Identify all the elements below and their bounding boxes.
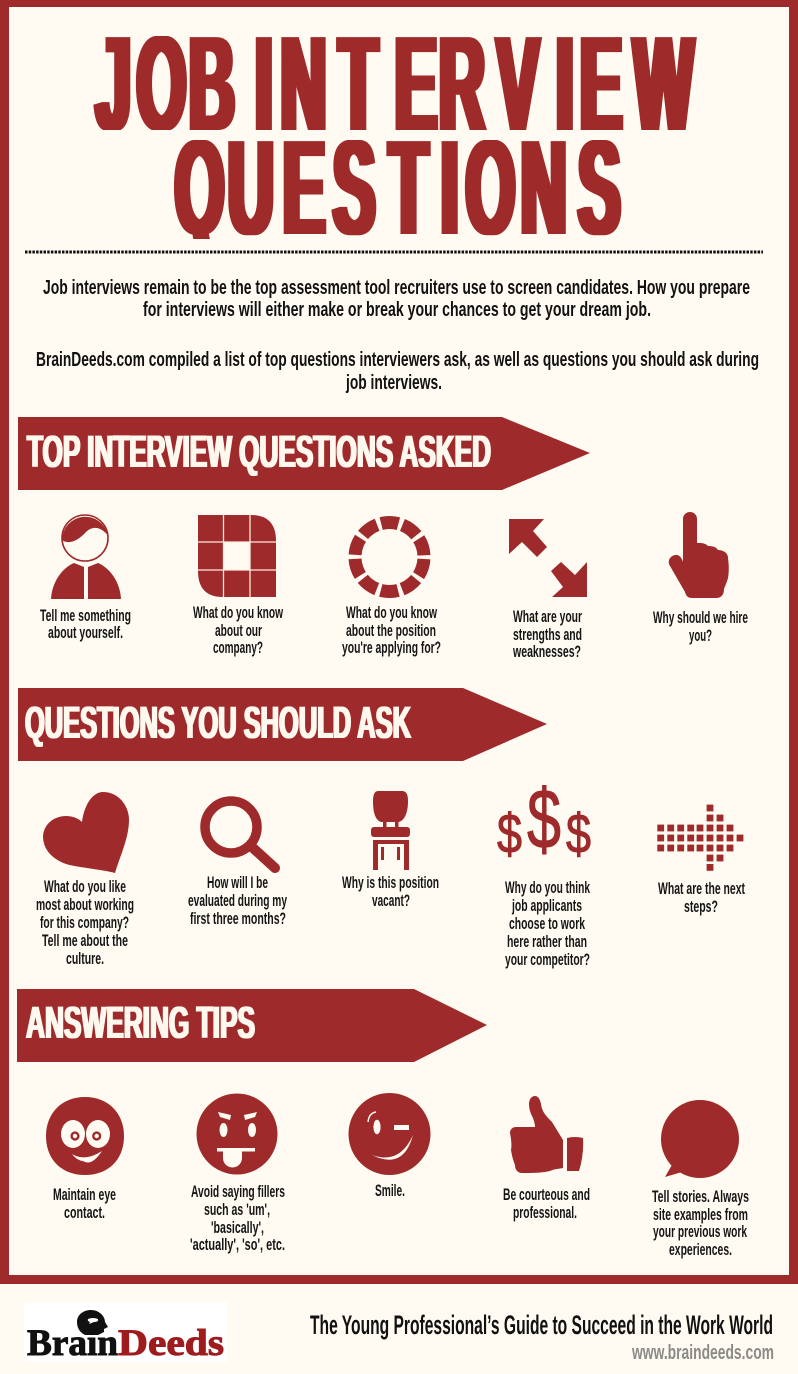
icon: dollar signs: [497, 772, 591, 866]
banner: questions you should ask: QUESTIONS YOU SHOULD ASK: [25, 697, 411, 748]
item: strengths and weaknesses: What are your: [513, 608, 582, 626]
logo: BrainDeeds: Deeds: [118, 1323, 224, 1364]
icon: diagonal arrows: [509, 519, 587, 597]
item: avoid fillers: 'actually', 'so', etc.: [190, 1236, 285, 1254]
item: why is this position vacant: Why is this position: [342, 874, 439, 892]
item: how will I be evaluated: evaluated during my: [188, 892, 288, 910]
item: next steps: What are the next: [658, 880, 745, 898]
logo: BrainDeeds: Brain: [27, 1323, 118, 1364]
item: about our company: company?: [213, 639, 263, 657]
item: why should we hire you: you?: [689, 627, 712, 645]
item: next steps: steps?: [684, 898, 718, 916]
item: smile: Smile.: [375, 1182, 405, 1200]
item: tell stories: experiences.: [669, 1241, 732, 1259]
item: tell stories: site examples from: [653, 1206, 748, 1224]
banner: answering tips: ANSWERING TIPS: [26, 997, 255, 1048]
item: what do you like: culture.: [66, 950, 104, 968]
item: about our company: about our: [215, 622, 262, 640]
item: tell stories: [652, 1100, 749, 1259]
item: avoid fillers: Avoid saying fillers: [191, 1183, 285, 1201]
item: about the position: What do you know: [346, 604, 437, 622]
item: tell me something: Tell me something: [40, 607, 131, 625]
item: smile: [348, 1093, 430, 1200]
title: JOB INTERVIEW: [96, 10, 694, 159]
icon: dollar signs: $: [527, 772, 561, 866]
item: what do you like: for this company?: [40, 914, 129, 932]
icon: heart: [43, 792, 129, 873]
item: how will I be evaluated: first three months?: [190, 910, 286, 928]
item: avoid fillers: 'basically',: [211, 1219, 264, 1237]
icon: winking face: [348, 1093, 430, 1175]
icon: magnifying glass: [205, 801, 275, 868]
item: why choose to work here: job applicants: [511, 897, 582, 915]
item: why is this position vacant: vacant?: [372, 892, 410, 910]
item: about our company: What do you know: [193, 604, 283, 622]
icon: thumbs up: [510, 1096, 583, 1173]
item: what do you like: [36, 792, 134, 968]
item: tell me something: [40, 515, 131, 642]
banner: answering tips: [17, 989, 487, 1062]
banner: questions you should ask: [18, 688, 547, 761]
item: about the position: about the position: [346, 622, 436, 640]
item: why choose to work here: your competitor?: [505, 951, 590, 969]
item: about the position: [342, 522, 441, 657]
icon: pixel arrow: [657, 805, 743, 871]
icon: dollar signs: $: [566, 802, 591, 865]
item: next steps: [657, 805, 745, 916]
item: how will I be evaluated: [188, 801, 288, 928]
item: what do you like: most about working: [36, 896, 134, 914]
item: courteous and professional: Be courteous and: [503, 1186, 590, 1204]
item: strengths and weaknesses: weaknesses?: [512, 643, 581, 661]
intro text: [36, 277, 759, 394]
item: why should we hire you: [653, 512, 748, 645]
icon: pointing hand: [669, 512, 729, 598]
item: why choose to work here: [497, 772, 591, 969]
item: strengths and weaknesses: strengths and: [513, 626, 582, 644]
icon: dollar signs: $: [497, 802, 522, 865]
logo: BrainDeeds: [24, 1302, 227, 1364]
item: why choose to work here: Why do you think: [505, 879, 591, 897]
icon: chair: [371, 791, 410, 870]
item: why is this position vacant: [342, 791, 439, 910]
banner: top interview questions asked: [18, 417, 590, 490]
item: courteous and professional: [503, 1096, 590, 1222]
intro text: job interviews.: [345, 372, 442, 394]
title: QUESTIONS: [175, 114, 620, 263]
item: why choose to work here: choose to work: [509, 915, 586, 933]
item: about our company: [193, 515, 283, 657]
icon: rounded square grid: [198, 515, 276, 597]
icon: tongue-out face: [196, 1094, 278, 1174]
item: why choose to work here: here rather than: [507, 933, 587, 951]
icon: speech bubble: [661, 1100, 739, 1178]
item: how will I be evaluated: How will I be: [207, 874, 268, 892]
item: strengths and weaknesses: [509, 519, 587, 661]
icon: segmented ring: [355, 522, 424, 592]
item: avoid fillers: [190, 1094, 285, 1254]
item: maintain eye contact: Maintain eye: [53, 1186, 116, 1204]
icon: person: [51, 515, 121, 599]
item: what do you like: Tell me about the: [42, 932, 128, 950]
item: about the position: you're applying for?: [342, 639, 441, 657]
item: courteous and professional: professional.: [513, 1204, 577, 1222]
item: what do you like: What do you like: [44, 878, 126, 896]
item: avoid fillers: such as 'um',: [204, 1201, 270, 1219]
title: [93, 36, 697, 239]
icon: wide-eyed face: [46, 1097, 124, 1175]
item: maintain eye contact: contact.: [64, 1204, 105, 1222]
item: maintain eye contact: [46, 1097, 124, 1222]
item: tell me something: about yourself.: [48, 624, 123, 642]
